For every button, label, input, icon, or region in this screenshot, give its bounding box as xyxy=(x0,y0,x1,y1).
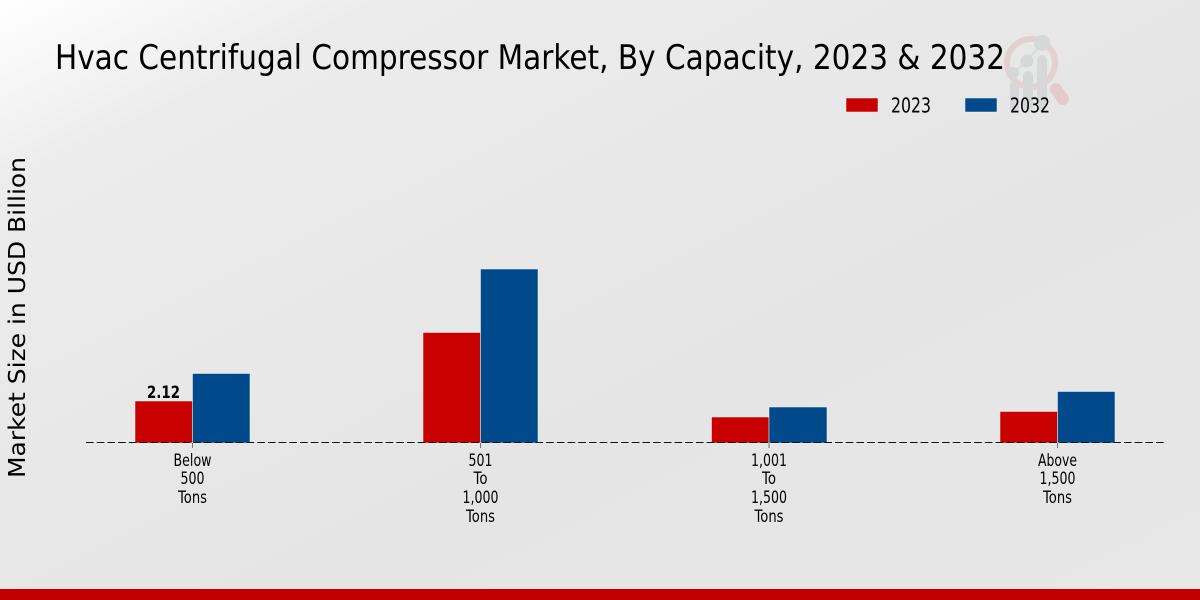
data label: 2.12: 2.12 xyxy=(147,383,180,402)
category label: 501 To 1,000 Tons: 501 xyxy=(468,451,492,470)
category label: 1,001 To 1,500 Tons: Tons xyxy=(754,507,784,526)
category label: 1,001 To 1,500 Tons: To xyxy=(761,469,776,488)
legend: 2023 xyxy=(846,94,931,118)
category label: Above 1,500 Tons: Tons xyxy=(1042,488,1072,507)
category label: Above 1,500 Tons: 1,500 xyxy=(1040,469,1076,488)
category label: 1,001 To 1,500 Tons: 1,001 xyxy=(751,451,787,470)
category label: 501 To 1,000 Tons: 1,000 xyxy=(462,488,498,507)
bar chart xyxy=(86,269,1164,526)
title: Hvac Centrifugal Compressor Market, By Capacity, 2023 & 2032 xyxy=(55,38,1005,78)
category label: 1,001 To 1,500 Tons: 1,500 xyxy=(751,488,787,507)
category label: Below 500 Tons xyxy=(174,451,212,507)
category label: 1,001 To 1,500 Tons xyxy=(751,451,787,526)
category label: Above 1,500 Tons: Above xyxy=(1038,451,1077,470)
bars: Below 500 Tons xyxy=(135,374,250,443)
legend xyxy=(846,94,1050,118)
category label: Below 500 Tons: Tons xyxy=(177,488,207,507)
category label: Above 1,500 Tons xyxy=(1038,451,1077,507)
category label: 501 To 1,000 Tons xyxy=(462,451,498,526)
footer bar xyxy=(0,589,1200,600)
bars: 1,001 To 1,500 Tons xyxy=(712,407,827,443)
category label: 501 To 1,000 Tons: Tons xyxy=(465,507,495,526)
icon: watermark logo xyxy=(1007,35,1063,111)
tick marks xyxy=(192,443,1058,448)
category label: Below 500 Tons: 500 xyxy=(180,469,204,488)
y axis label: Market Size in USD Billion xyxy=(5,157,31,478)
category label: Below 500 Tons: Below xyxy=(174,451,212,470)
bars: Above 1,500 Tons xyxy=(1000,392,1115,443)
legend: 2032: 2032 xyxy=(1010,94,1050,118)
category label: 501 To 1,000 Tons: To xyxy=(473,469,488,488)
legend: 2032 xyxy=(965,94,1050,118)
x axis baseline xyxy=(86,442,1164,444)
legend: 2023: 2023 xyxy=(891,94,931,118)
bars: 501 To 1,000 Tons xyxy=(423,269,538,443)
